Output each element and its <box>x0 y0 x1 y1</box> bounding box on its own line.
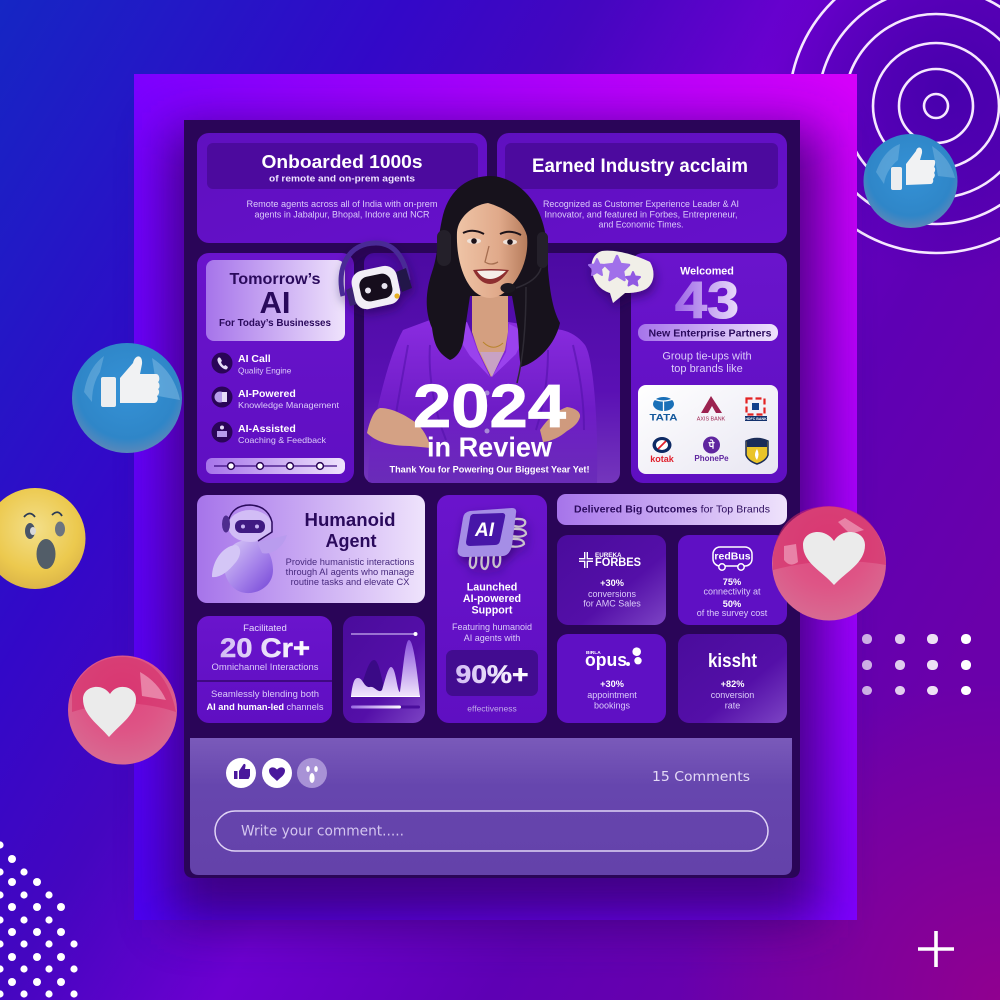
hair <box>427 176 560 367</box>
text: acclaim body: and Economic Times. <box>598 220 684 230</box>
collar <box>462 322 519 376</box>
card: eureka forbes: EUREKA <box>595 552 622 559</box>
heading: humanoid agent: Agent <box>326 531 376 551</box>
number: 20 Cr+: 20 Cr+ <box>220 633 310 663</box>
slider bar <box>206 458 345 474</box>
panel: comment bar <box>190 738 792 875</box>
panel: launched AI-powered support: effectiveness <box>467 704 517 714</box>
title: 2024: 2024 <box>413 372 566 440</box>
comment input <box>215 811 768 851</box>
chart: light area <box>351 640 420 696</box>
logo: amity shield <box>746 438 768 464</box>
card: birla opus: appointment <box>587 690 637 700</box>
chart: dark back peaks <box>358 660 387 696</box>
icon: star speech bubble <box>589 251 653 303</box>
necklace <box>483 342 503 347</box>
panel: facilitated 20 Cr+ <box>197 616 332 723</box>
heading: onboarded: Onboarded 1000s <box>262 152 422 172</box>
text: humanoid body: through AI agents who manage <box>286 567 414 577</box>
icon: heart sphere left <box>68 656 177 764</box>
logo: tata: TATA <box>650 412 678 424</box>
text: launched heading: Launched <box>467 582 517 594</box>
item: AI call: AI Call <box>238 353 271 365</box>
card: eureka forbes: FORBES <box>595 557 641 569</box>
number: 43: 43 <box>675 272 739 330</box>
text: humanoid body: routine tasks and elevate CX <box>291 577 409 587</box>
logo: axis bank: AXIS BANK <box>697 416 726 422</box>
card: redbus: 75% <box>723 577 741 587</box>
text: group tie-ups: top brands like <box>671 363 743 375</box>
logo: phonepe: PhonePe <box>694 454 729 463</box>
card: kissht: +82% <box>721 679 744 689</box>
comment input: Write your comment..... <box>241 824 404 840</box>
face <box>457 203 527 298</box>
hand left <box>367 408 431 448</box>
smile <box>473 269 509 284</box>
card: tomorrow's AI heading: For Today’s Businesses <box>219 318 331 329</box>
pill: new enterprise partners <box>638 324 778 341</box>
subheading: onboarded: of remote and on-prem agents <box>269 174 415 184</box>
dark main panel <box>184 120 800 878</box>
dots grid right <box>862 634 971 695</box>
card: kissht: rate <box>725 700 740 710</box>
text: launched heading: Support <box>472 604 513 616</box>
card: eureka forbes: for AMC Sales <box>583 598 641 608</box>
panel: area chart <box>343 616 425 723</box>
reaction: like <box>226 758 256 788</box>
magenta backing panel <box>134 74 857 920</box>
panel: facilitated 20 Cr+: AI and human-led channels <box>206 702 324 712</box>
card: birla opus: bookings <box>594 700 631 710</box>
plus icon <box>918 931 954 967</box>
stat box: 90%+ <box>446 650 538 696</box>
heading: acclaim: Earned Industry acclaim <box>532 156 748 177</box>
undershirt <box>480 352 504 377</box>
panel: onboarded <box>197 133 487 243</box>
panel: facilitated 20 Cr+: Facilitated <box>243 623 287 634</box>
label: welcomed: Welcomed <box>680 266 734 278</box>
background corner tint <box>680 680 1000 1000</box>
heading: humanoid agent: Humanoid <box>304 510 396 530</box>
logo: kotak: kotak <box>650 454 675 464</box>
background ring shade <box>740 0 1000 300</box>
text: launched heading: AI-powered <box>463 593 521 605</box>
icon: heart sphere right <box>772 506 886 620</box>
text: comment count: 15 Comments <box>652 770 750 785</box>
panel: facilitated 20 Cr+: Omnichannel Interactions <box>212 662 319 672</box>
card: brand logos <box>638 385 778 474</box>
pill: new enterprise partners: New Enterprise Partners <box>648 328 772 340</box>
stat box: 90%+: 90%+ <box>456 661 528 689</box>
card: tomorrow's AI heading: Tomorrow’s <box>230 271 320 288</box>
headset <box>437 230 548 383</box>
item: AI call <box>212 352 292 376</box>
sleeve folds <box>392 345 584 440</box>
card: tomorrow's AI heading: AI <box>260 285 290 320</box>
icon: robot with headphones <box>341 243 412 311</box>
item: AI-powered: Knowledge Management <box>238 401 340 410</box>
item: AI-assisted: Coaching & Feedback <box>238 436 327 445</box>
logo: phonepe <box>694 436 729 463</box>
panel: facilitated 20 Cr+: Seamlessly blending both <box>211 688 319 699</box>
card: redbus: 50% <box>723 599 741 609</box>
neck <box>472 288 508 377</box>
card: eureka forbes: conversions <box>588 589 637 599</box>
item: AI-powered <box>212 386 340 410</box>
panel glow <box>170 130 820 920</box>
item: AI-powered: AI-Powered <box>238 388 296 400</box>
panel: 2024 in review background <box>364 253 620 483</box>
card: kissht: kissht <box>708 651 758 672</box>
item: AI call: Quality Engine <box>238 366 292 376</box>
tagline: Thank You for Powering Our Biggest Year Yet! <box>390 464 590 474</box>
panel: acclaim <box>497 133 787 243</box>
hand right <box>540 407 580 442</box>
panel: launched AI-powered support <box>437 495 547 723</box>
brows and eyes <box>463 231 521 235</box>
text: featuring: Featuring humanoid <box>452 622 532 632</box>
heading bar: delivered big outcomes <box>557 494 787 525</box>
card: birla opus: +30% <box>600 679 624 689</box>
illustration: headset woman <box>367 176 597 483</box>
text: featuring: AI agents with <box>464 633 520 643</box>
item: AI-assisted: AI-Assisted <box>238 423 296 435</box>
card: tomorrow's AI heading <box>206 260 345 341</box>
heading bar: delivered big outcomes: Delivered Big Outcomes for Top Brands <box>574 504 770 516</box>
text: humanoid body: Provide humanistic interactions <box>286 557 415 567</box>
concentric rings decoration <box>789 0 1000 253</box>
card: redbus: redBus <box>714 550 751 562</box>
card: birla opus: BIRLA <box>586 650 601 656</box>
icon: AI chip <box>458 508 526 569</box>
text: group tie-ups: Group tie-ups with <box>662 350 752 362</box>
logo: hdfc bank: HDFC BANK <box>745 417 767 421</box>
item: AI-assisted <box>212 422 327 445</box>
title: in review: in Review <box>427 432 552 462</box>
logo: phonepe: पे <box>708 436 716 452</box>
text: acclaim body: Recognized as Customer Experience Leader & AI <box>543 199 739 209</box>
text: onboarded body: agents in Jabalpur, Bhopal, Indore and NCR <box>254 210 430 220</box>
shirt and arms <box>368 320 597 483</box>
icon: wow sphere <box>0 488 86 589</box>
card: birla opus <box>557 634 666 723</box>
card: kissht <box>678 634 787 723</box>
card: redbus <box>678 535 787 625</box>
card: birla opus: opus <box>585 650 627 670</box>
reaction: wow <box>297 758 327 788</box>
illustration: humanoid robot <box>212 505 287 593</box>
panel: welcomed 43 <box>631 253 787 483</box>
panel: tomorrow's AI <box>197 253 354 483</box>
card: redbus: of the survey cost <box>697 608 768 618</box>
reaction: heart <box>262 758 292 788</box>
text: acclaim body: Innovator, and featured in Forbes, Entrepreneur, <box>544 210 738 220</box>
icon: like sphere left <box>72 343 182 453</box>
dots pattern bottom left <box>0 841 78 998</box>
text: onboarded body: Remote agents across all of India with on-prem <box>246 199 438 209</box>
panel: humanoid agent <box>197 495 425 603</box>
shirt buttons <box>484 390 490 396</box>
card: eureka forbes: +30% <box>600 578 624 588</box>
card: kissht: conversion <box>711 690 754 700</box>
card: redbus: connectivity at <box>703 586 761 596</box>
icon: like sphere top right <box>864 134 958 228</box>
icon: AI chip: AI <box>474 520 495 541</box>
card: eureka forbes <box>557 535 666 625</box>
